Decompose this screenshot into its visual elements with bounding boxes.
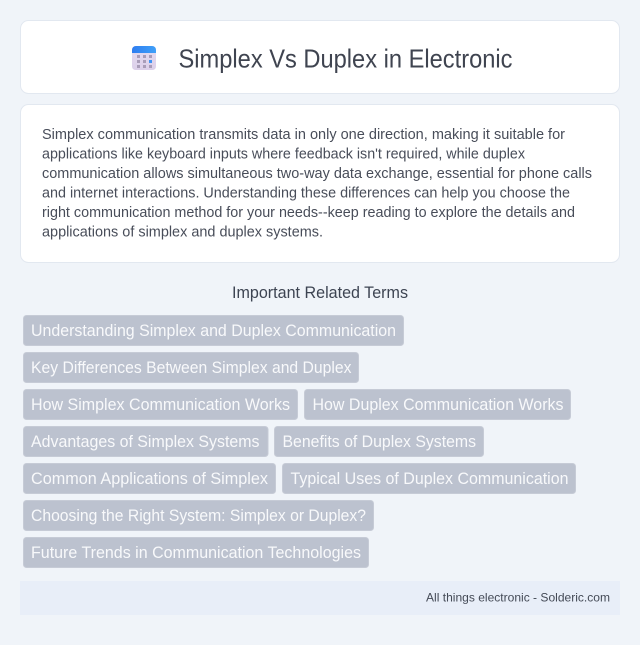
tag: future trends: Future Trends in Communication Technologies	[31, 543, 361, 562]
tag: how simplex works: How Simplex Communication Works	[31, 395, 290, 414]
related terms tags	[24, 316, 576, 568]
tag: common applications	[24, 464, 276, 494]
footer: All things electronic - Solderic.com	[426, 590, 610, 604]
tag: benefits of duplex	[274, 426, 484, 456]
tag: understanding	[24, 316, 404, 346]
heading: related terms: Important Related Terms	[232, 284, 408, 302]
tag: key differences	[24, 352, 358, 382]
tag: how simplex works	[24, 390, 298, 420]
tag: advantages of simplex: Advantages of Simplex Systems	[31, 432, 260, 451]
tag: common applications: Common Applications of Simplex	[31, 469, 268, 488]
intro paragraph: Simplex communication transmits data in only one direction, making it suitable for	[42, 126, 565, 143]
tag: typical uses	[282, 464, 576, 494]
tag: typical uses: Typical Uses of Duplex Communication	[290, 469, 568, 488]
tag: benefits of duplex: Benefits of Duplex Systems	[282, 432, 476, 451]
panel: title header	[20, 20, 620, 94]
intro paragraph: applications of simplex and duplex systems.	[42, 224, 323, 240]
title: Simplex Vs Duplex in Electronic	[178, 44, 512, 74]
intro paragraph: right communication method for your needs--keep reading to explore the details and	[42, 204, 575, 221]
intro paragraph: applications like keyboard inputs where feedback isn't required, while duplex	[42, 146, 525, 162]
intro paragraph: and internet interactions. Understanding these differences can help you choose the	[42, 184, 570, 202]
tag: understanding: Understanding Simplex and Duplex Communication	[31, 321, 396, 340]
tag: advantages of simplex	[24, 426, 268, 456]
tag: future trends	[24, 538, 368, 568]
tag: how duplex works: How Duplex Communication Works	[312, 395, 564, 414]
footer	[20, 581, 620, 615]
intro paragraph: communication allows simultaneous two-way data exchange, essential for phone calls	[42, 165, 592, 182]
tag: how duplex works	[304, 390, 570, 420]
tag: choosing the right system: Choosing the Right System: Simplex or Duplex?	[31, 506, 366, 525]
panel: introduction	[20, 104, 620, 262]
tag: key differences: Key Differences Between Simplex and Duplex	[31, 358, 352, 377]
tag: choosing the right system	[24, 500, 374, 530]
icon: calendar grid	[132, 46, 156, 70]
intro paragraph	[42, 126, 592, 240]
